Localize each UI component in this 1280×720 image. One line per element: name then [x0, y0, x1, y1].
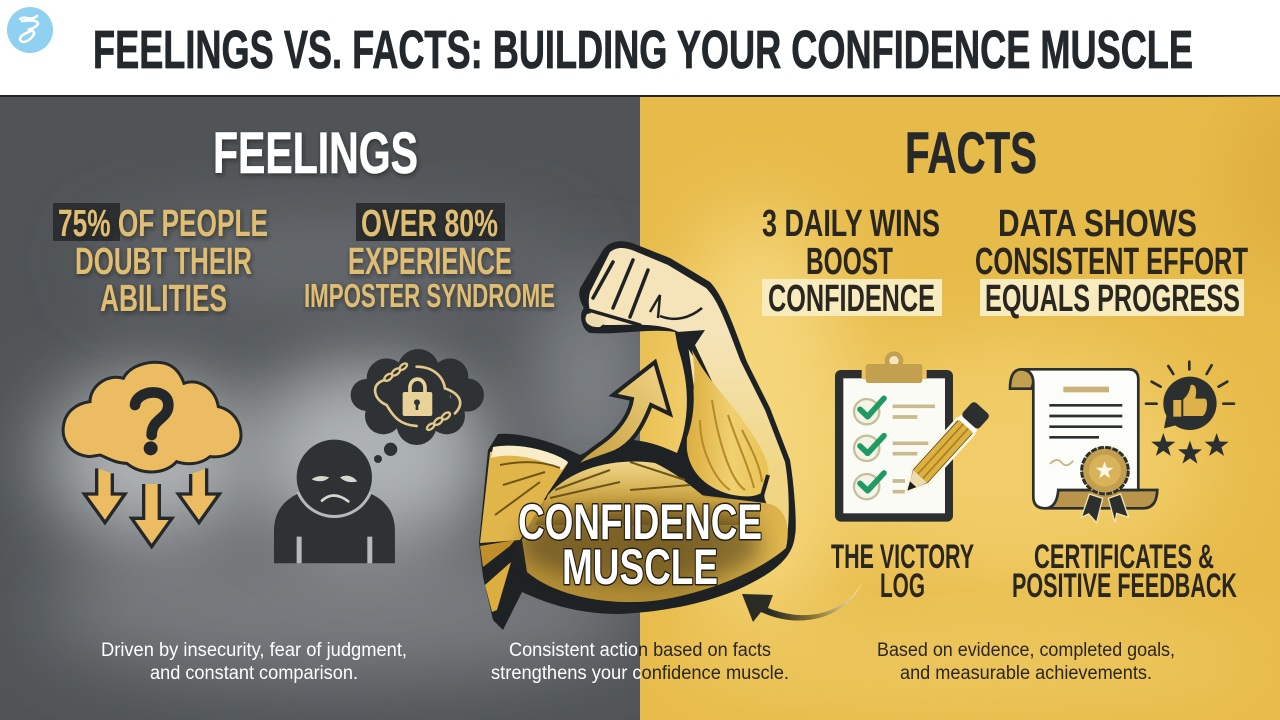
label: victory log [831, 538, 974, 605]
stat: 75 percent: DOUBT THEIR [75, 241, 252, 283]
caption: feelings [101, 640, 407, 684]
stat: over 80 percent: OVER 80% [361, 203, 498, 245]
label: certificates [1012, 538, 1237, 605]
label: confidence muscle: CONFIDENCE [518, 494, 762, 550]
header band [0, 0, 1280, 95]
caption: facts: and measurable achievements. [900, 663, 1152, 684]
caption: centre: strengthens your confidence muscle. [491, 663, 789, 684]
heading: feelings: FEELINGS [213, 121, 418, 186]
caption: facts: Based on evidence, completed goals, [877, 640, 1175, 661]
dark halo behind label [520, 507, 760, 583]
logo [7, 7, 53, 53]
icon: certificate with seal [1010, 369, 1157, 523]
label: victory log: THE VICTORY [831, 538, 974, 576]
stat: consistent effort: DATA SHOWS [998, 203, 1197, 245]
growth arrow [573, 362, 670, 468]
stat: consistent effort [975, 203, 1248, 320]
arm upper and fist [589, 248, 789, 545]
stat: 75 percent [53, 203, 268, 320]
biceps [535, 462, 760, 525]
heading: facts: FACTS [905, 121, 1037, 186]
label: confidence muscle: MUSCLE [562, 539, 718, 595]
caption: centre: Consistent action based on facts [509, 640, 771, 661]
stat: 75 percent: 75% OF PEOPLE [58, 203, 268, 245]
feedback arrow [742, 580, 863, 622]
icon: doubt cloud with falling arrows [63, 362, 241, 547]
stat: over 80 percent: EXPERIENCE [348, 241, 512, 283]
label: confidence muscle [518, 494, 762, 595]
caption: centre [491, 640, 789, 684]
stat: over 80 percent [304, 203, 555, 314]
caption: feelings: and constant comparison. [150, 663, 358, 684]
shoulder fold [480, 450, 568, 543]
stat: 75 percent: ABILITIES [100, 278, 227, 320]
forearm muscle [687, 350, 769, 496]
lower muscle [522, 495, 788, 602]
stat: daily wins [762, 203, 942, 320]
icon: sad person with locked thought [274, 349, 484, 563]
caption: feelings: Driven by insecurity, fear of judgment, [101, 640, 407, 661]
stat: over 80 percent: IMPOSTER SYNDROME [304, 277, 555, 314]
stat: daily wins: BOOST [806, 241, 893, 283]
caption: facts [877, 640, 1175, 684]
stat: daily wins: 3 DAILY WINS [762, 203, 940, 245]
panel: facts [640, 80, 1280, 720]
icon: flexed confidence muscle [479, 241, 863, 630]
stat: daily wins: CONFIDENCE [768, 278, 935, 320]
icon: clipboard with pencil [835, 351, 990, 522]
icon: thumbs up and stars [1146, 362, 1234, 464]
label: victory log: LOG [880, 567, 925, 605]
